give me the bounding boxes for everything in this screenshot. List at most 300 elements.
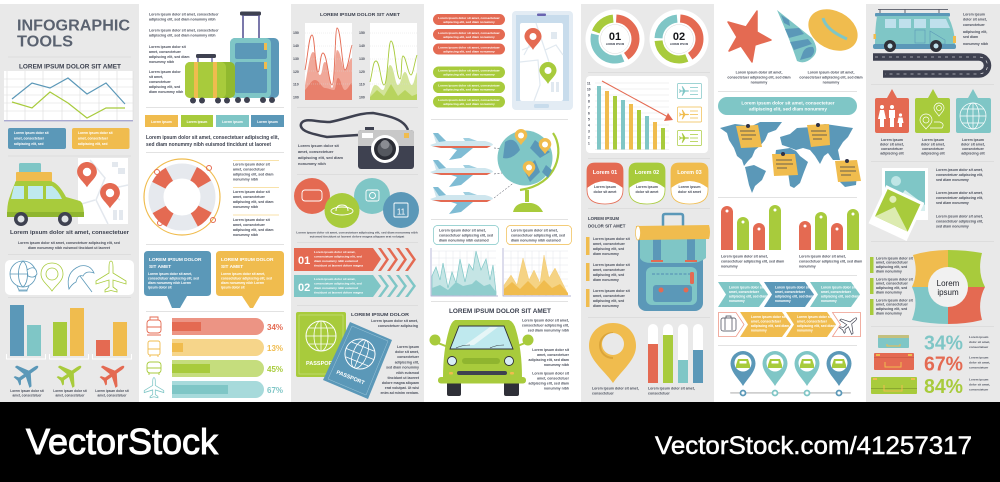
- callout: blue speech: Lorem ipsum dolor sit amet,: [148, 272, 192, 276]
- icon: train: [147, 317, 161, 335]
- banner: adipiscing elit, sed diam nonummy: [749, 107, 827, 112]
- text: intro: Lorem ipsum dolor sit amet, consectetuer adipiscing elit,: [146, 135, 280, 141]
- icon: road: [873, 57, 987, 74]
- list: backpack: Lorem ipsum dolor sit: [593, 263, 631, 267]
- list: backpack: adipiscing elit, sed: [593, 247, 624, 251]
- heading: backpack: LOREM IPSUM: [588, 216, 619, 221]
- heading: lorem ipsum: Lorem ipsum dolor sit amet, consectetuer: [10, 230, 130, 236]
- captions: adipiscing elit: [880, 152, 905, 156]
- callout: yellow speech: [216, 251, 284, 308]
- text: passport: nibh euismod: [396, 371, 419, 375]
- list: flower: Lorem ipsum dolor sit: [876, 278, 914, 282]
- map pins timeline: [730, 351, 852, 396]
- title: TOOLS: [17, 34, 73, 50]
- list: flower: amet, consectetuer: [876, 261, 909, 265]
- bar chart: [6, 305, 132, 359]
- tags: Lorem ipsum: [636, 185, 658, 189]
- text: photos: sed diam nonummy: [936, 224, 970, 228]
- callout: teal outline: Lorem ipsum dolor sit amet,: [439, 228, 486, 232]
- callout: blue: Lorem ipsum dolor sit: [14, 131, 50, 135]
- red pills: adipiscing elit, sed diam nonummy: [443, 49, 495, 53]
- text block: nonummy nibh: [149, 60, 174, 64]
- captions: adipiscing elit: [961, 152, 986, 156]
- text: camera: amet, consectetuer: [298, 149, 334, 154]
- text list: [233, 160, 279, 237]
- list: backpack: amet, consectetuer: [593, 242, 626, 246]
- callout: blue speech: SIT AMET: [149, 264, 171, 270]
- text: car: consectetuer adipiscing elit,: [522, 324, 569, 328]
- arrow 01: 01: [298, 255, 310, 267]
- percentages: 34%: [924, 332, 963, 354]
- text: photos: sed diam nonummy: [936, 178, 970, 182]
- label row: Lorem ipsum: [257, 120, 278, 124]
- red pills: Lorem ipsum dolor sit amet, consectetuer: [438, 45, 501, 49]
- text: camera: adipiscing elit, sed diam: [298, 155, 344, 160]
- captions: Lorem ipsum dolor sit amet,: [799, 254, 846, 258]
- list: backpack: diam nonummy: [593, 304, 619, 308]
- donut 01: [586, 10, 644, 68]
- list: backpack: Lorem ipsum dolor sit: [593, 237, 631, 241]
- text: percentages: dolor sit amet,: [969, 340, 990, 344]
- axis labels: red: 120: [293, 70, 299, 74]
- red pills: [433, 14, 505, 54]
- arrow 02: diam nonummy nibh euismod: [314, 286, 358, 290]
- text: bus: dolor sit amet,: [963, 18, 987, 22]
- list: flower: adipiscing elit, sed: [876, 265, 907, 269]
- icon: plane outline: [144, 378, 164, 398]
- declining bar chart: 5: [588, 118, 590, 122]
- text list: Lorem ipsum dolor sit: [233, 218, 271, 222]
- icon: planes: [430, 133, 525, 214]
- list: backpack: diam nonummy: [593, 252, 619, 256]
- green pills: Lorem ipsum dolor sit amet, consectetuer: [438, 68, 501, 72]
- text: car: Lorem ipsum dolor sit: [532, 372, 570, 376]
- body text: diam nonummy nibh euismod tincidunt ut laoreet: [28, 246, 111, 250]
- text block: adipiscing elit, sed: [149, 85, 180, 89]
- text block: sit amet,: [149, 75, 163, 79]
- captions: nonummy: [721, 264, 738, 268]
- red pills: Lorem ipsum dolor sit amet, consectetuer: [438, 16, 501, 20]
- label row: [145, 115, 284, 127]
- icon: green passport: PASSPORT: [306, 361, 336, 367]
- text list: nonummy nibh: [233, 233, 258, 237]
- axis labels: green: 110: [359, 82, 365, 86]
- list: flower: amet, consectetuer: [876, 303, 909, 307]
- captions: amet, consectetuer: [12, 394, 42, 398]
- icon: red plane: [95, 356, 131, 392]
- text: photos: Lorem ipsum dolor sit amet,: [936, 214, 983, 218]
- area chart: green: [370, 23, 417, 100]
- red pills: adipiscing elit, sed diam nonummy: [443, 20, 495, 24]
- icon: green suitcase: [871, 377, 917, 394]
- declining bar chart: 9: [588, 94, 590, 98]
- text: car: Lorem ipsum dolor sit amet,: [522, 318, 569, 322]
- title: INFOGRAPHIC: [17, 18, 130, 34]
- text: passport: dolor sit amet,: [395, 350, 419, 354]
- icon: plane: [96, 261, 126, 292]
- arrow row 2: amet, consectetuer: [797, 320, 828, 324]
- text: percentages: consectetuer: [969, 388, 989, 392]
- arrow 01: consectetuer adipiscing elit, sed: [314, 254, 362, 258]
- captions: consectetuer: [922, 147, 945, 151]
- axis labels: green: 140: [359, 44, 365, 48]
- arrow row 1: adipiscing elit, sed diam: [821, 294, 859, 298]
- arrow row 2: nonummy: [797, 328, 813, 332]
- arrow 01: Lorem ipsum dolor sit amet,: [314, 250, 356, 254]
- text block: adipiscing elit, sed diam nonummy nibh: [149, 34, 216, 38]
- callout: yellow: [72, 128, 130, 149]
- donut 01: LOREM IPSUM: [606, 42, 624, 46]
- icon: pin: [41, 263, 63, 291]
- callout: yellow speech: diam nonummy nibh Lorem: [221, 281, 264, 285]
- chart: teal area: [431, 248, 498, 296]
- tags: Lorem ipsum: [594, 185, 616, 189]
- car with luggage: [7, 163, 84, 226]
- body text: Lorem ipsum dolor sit amet, consectetuer adipiscing elit, sed: [18, 241, 120, 245]
- list: backpack: adipiscing elit, sed: [593, 273, 624, 277]
- captions: dolor sit amet,: [880, 142, 904, 146]
- donut 01: 01: [609, 31, 621, 43]
- progress bars: 45%: [267, 365, 283, 374]
- heading: LOREM IPSUM DOLOR SIT AMET: [19, 64, 121, 70]
- text: circles caption: [296, 230, 418, 238]
- arrow row 1: nonummy: [821, 299, 837, 303]
- declining bar chart: 10: [587, 88, 591, 92]
- text: car: [522, 318, 570, 390]
- captions: nonummy: [799, 264, 816, 268]
- text: intro: sed diam nonummy nibh euismod tincidunt ut laoreet: [146, 142, 271, 148]
- icon: blue passport: PASSPORT: [335, 370, 366, 387]
- axis labels: red: 100: [293, 96, 299, 100]
- callout: yellow: adipiscing elit, sed: [78, 142, 108, 146]
- captions: Lorem ipsum dolor sit amet,: [736, 70, 782, 74]
- callout: blue: amet, consectetuer: [14, 136, 45, 140]
- banner: Lorem ipsum dolor sit amet, consectetuer: [741, 101, 835, 106]
- list: backpack: diam nonummy: [593, 278, 619, 282]
- progress bars: 67%: [267, 386, 283, 395]
- text block: [149, 12, 219, 94]
- text: percentages: consectetuer: [969, 345, 989, 349]
- text: percentages: Lorem ipsum: [969, 378, 989, 382]
- callout: blue speech: diam nonummy nibh Lorem: [148, 281, 191, 285]
- text: passport: sed diam nonummy: [386, 366, 419, 370]
- arrow row 2: Lorem ipsum dolor sit: [797, 315, 833, 319]
- text: percentages: [969, 335, 990, 392]
- icon: starfish: [728, 11, 771, 62]
- arrow 01: tincidunt ut laoreet dolore magna: [314, 264, 363, 268]
- captions: consectetuer adipiscing elit, sed diam: [799, 76, 863, 80]
- panel: phone and globe: [430, 11, 573, 396]
- world map with notes: [720, 122, 861, 193]
- list: flower: diam nonummy: [876, 311, 902, 315]
- text: car: nonummy nibh: [544, 386, 569, 390]
- progress bars: 13%: [267, 344, 283, 353]
- text block: adipiscing elit, sed diam nonummy nibh: [149, 18, 216, 22]
- list: backpack: amet, consectetuer: [593, 294, 626, 298]
- text block: adipiscing elit, sed diam: [149, 55, 189, 59]
- text list: amet, consectetuer: [233, 223, 266, 227]
- callout: yellow speech: LOREM IPSUM DOLOR: [221, 257, 274, 263]
- tile: globe: [956, 89, 991, 133]
- heading: car: LOREM IPSUM DOLOR SIT AMET: [449, 308, 551, 315]
- chart: yellow area: [503, 248, 571, 296]
- captions: Lorem ipsum dolor sit amet,: [721, 254, 768, 258]
- text: photos: consectetuer adipiscing elit,: [936, 220, 983, 224]
- callout: teal outline: consectetuer adipiscing elit, sed: [439, 234, 493, 238]
- icon: car: [147, 362, 161, 375]
- panel: infographic tools: [4, 18, 134, 398]
- declining bar chart: 8: [588, 100, 590, 104]
- axis labels: green: 120: [359, 70, 365, 74]
- tags: dolor sit amet: [594, 190, 617, 194]
- arrow 01: [294, 248, 416, 271]
- list: flower: diam nonummy: [876, 269, 902, 273]
- text: bus: adipiscing elit,: [963, 30, 987, 34]
- icon: plane outline: [836, 311, 863, 338]
- icon: blue plane: [9, 356, 45, 392]
- banner: [718, 97, 857, 115]
- captions: Lorem ipsum dolor sit: [53, 389, 88, 393]
- callout: blue: [8, 128, 66, 149]
- captions: [592, 386, 695, 396]
- text list: Lorem ipsum dolor sit: [233, 190, 271, 194]
- callout: yellow speech: consectetuer adipiscing elit, sed: [221, 276, 272, 280]
- icon box: [5, 260, 134, 295]
- axis labels: green: 100: [359, 96, 365, 100]
- captions: consectetuer: [648, 392, 670, 396]
- declining bar chart: 4: [588, 124, 590, 128]
- axis labels: green: 150: [359, 31, 365, 35]
- text list: amet, consectetuer: [233, 195, 266, 199]
- diagram: flower: [912, 250, 985, 324]
- title: [17, 18, 130, 50]
- declining bar chart: 3: [588, 130, 590, 134]
- axis labels: red: [293, 31, 299, 100]
- icon: red suitcase: [874, 353, 914, 370]
- list: backpack: [586, 237, 631, 308]
- text list: Lorem ipsum dolor sit: [233, 162, 271, 166]
- captions: consectetuer adipiscing elit, sed diam: [799, 260, 862, 264]
- icon: balloon: [10, 261, 37, 291]
- diagram: flower: ipsum: [937, 288, 959, 297]
- arrow row 2: [718, 311, 863, 338]
- note 2: [807, 123, 830, 147]
- label row: Lorem ipsum: [222, 120, 243, 124]
- percentages: [924, 332, 963, 398]
- callout: blue speech: [144, 251, 211, 308]
- list: backpack: Lorem ipsum dolor sit: [593, 289, 631, 293]
- arrow row 1: [718, 282, 860, 307]
- panel: travel and world map: [718, 1, 865, 396]
- text: car: Lorem ipsum dolor sit: [532, 348, 570, 352]
- panel: charts and camera: [293, 12, 420, 399]
- arrow row 1: nonummy: [729, 299, 745, 303]
- declining bar chart: 7: [588, 106, 590, 110]
- tags: [587, 163, 708, 204]
- red pills: adipiscing elit, sed diam nonummy: [443, 35, 495, 39]
- icon circles: [294, 178, 419, 228]
- icon: green car front: [430, 320, 534, 396]
- label row: Lorem ipsum: [151, 120, 172, 124]
- text: percentages: Lorem ipsum: [969, 335, 989, 339]
- icon: hat: [801, 1, 865, 59]
- tags: Lorem 01: [593, 170, 617, 176]
- text: passport: consectetuer adipiscing: [378, 324, 418, 328]
- captions: amet, consectetuer: [97, 394, 127, 398]
- icon: bus: [148, 341, 160, 357]
- tags: Lorem 02: [635, 170, 659, 176]
- icon: big pin: [589, 323, 636, 383]
- text: car: nonummy nibh: [544, 363, 569, 367]
- arrow 02: Lorem ipsum dolor sit amet,: [314, 277, 356, 281]
- arrow row 2: nonummy: [751, 328, 767, 332]
- captions: adipiscing elit: [921, 152, 946, 156]
- green pills: [433, 66, 505, 108]
- arrow 02: [294, 275, 416, 297]
- axis labels: red: 130: [293, 57, 299, 61]
- text: intro: [146, 135, 280, 148]
- text list: amet, consectetuer: [233, 168, 266, 172]
- donut 02: LOREM IPSUM: [670, 42, 688, 46]
- text list: adipiscing elit, sed diam: [233, 172, 273, 176]
- text: photos: consectetuer adipiscing elit,: [936, 173, 983, 177]
- captions: dolor sit amet,: [921, 142, 945, 146]
- captions: [880, 138, 986, 156]
- list: backpack: amet, consectetuer: [593, 268, 626, 272]
- axis labels: green: [359, 31, 365, 100]
- list: flower: diam nonummy: [876, 290, 902, 294]
- callout: blue speech: ipsum dolor sit: [148, 286, 173, 290]
- icon: shell: [777, 10, 816, 62]
- green pills: adipiscing elit, sed diam nonummy: [443, 102, 495, 106]
- note 1: [736, 124, 762, 148]
- text block: consectetuer: [149, 80, 171, 84]
- arrow row 2: adipiscing elit, sed diam: [751, 324, 789, 328]
- text: photos: Lorem ipsum dolor sit amet,: [936, 168, 983, 172]
- icon: suitcase outline: [721, 316, 736, 331]
- note 4: [835, 159, 861, 182]
- percentages: 84%: [924, 376, 963, 398]
- rounded bars: [721, 205, 859, 250]
- declining bar chart: 11: [587, 82, 591, 86]
- heading: backpack: DOLOR SIT AMET: [588, 224, 626, 228]
- captions: [721, 254, 862, 268]
- text: passport: tincidunt ut laoreet: [388, 376, 420, 380]
- vertical bars: [648, 324, 703, 383]
- label row: Lorem ipsum: [187, 120, 207, 124]
- arrow row 1: Lorem ipsum dolor sit: [775, 286, 811, 290]
- callout: yellow speech: ipsum dolor sit: [221, 286, 246, 290]
- text: passport: Lorem ipsum dolor sit amet,: [371, 319, 418, 323]
- text: car: amet, consectetuer: [537, 376, 570, 380]
- brand: VectorStock: [26, 421, 219, 462]
- captions: Lorem ipsum: [881, 138, 903, 142]
- icon: teal suitcase: [878, 335, 909, 348]
- captions: [10, 389, 130, 398]
- captions: Lorem ipsum: [922, 138, 944, 142]
- tags: Lorem 03: [677, 170, 702, 176]
- icon: blue passport: [323, 322, 392, 399]
- captions: dolor sit amet,: [961, 142, 985, 146]
- captions: Lorem ipsum: [962, 138, 984, 142]
- callout: teal outline: [434, 226, 498, 244]
- diagram: flower: Lorem: [937, 279, 960, 288]
- text list: nonummy nibh: [233, 178, 258, 182]
- text list: adipiscing elit, sed diam: [233, 228, 273, 232]
- text: percentages: Lorem ipsum: [969, 356, 989, 360]
- arrow row 2: amet, consectetuer: [751, 320, 782, 324]
- progress bars: 34%: [267, 323, 283, 332]
- list: flower: amet, consectetuer: [876, 282, 909, 286]
- callout: yellow outline: Lorem ipsum dolor sit amet,: [511, 228, 558, 232]
- callout: teal outline: diam nonummy nibh euismod: [439, 238, 489, 242]
- panel: luggage: [144, 12, 284, 398]
- text: photos: sed diam nonummy: [936, 201, 970, 205]
- list: flower: Lorem ipsum dolor sit: [876, 298, 914, 302]
- text: camera: Lorem ipsum dolor sit: [298, 143, 340, 148]
- captions: consectetuer: [592, 392, 614, 396]
- text: photos: [936, 168, 983, 228]
- arrow row 1: amet, consectetuer: [729, 290, 760, 294]
- green pills: adipiscing elit, sed diam nonummy: [443, 88, 495, 92]
- callout: yellow outline: consectetuer adipiscing elit, sed: [511, 234, 565, 238]
- icon: phone with map: [512, 11, 573, 110]
- icon: big suitcase: [230, 12, 279, 103]
- icon: photos: [869, 168, 928, 241]
- text: passport: enim ad minim veniam.: [380, 391, 419, 395]
- captions: consectetuer adipiscing elit, sed diam: [727, 76, 791, 80]
- arrow row 1: Lorem ipsum dolor sit: [821, 286, 857, 290]
- text block: Lorem ipsum dolor sit: [149, 45, 187, 49]
- captions: Lorem ipsum dolor sit amet,: [648, 386, 695, 390]
- captions: amet, consectetuer: [55, 394, 85, 398]
- list: flower: [870, 256, 914, 315]
- text block: diam nonummy nibh: [149, 90, 183, 94]
- tags: dolor sit amet: [678, 190, 702, 194]
- callout: yellow speech: SIT AMET: [221, 264, 243, 270]
- tickets: [678, 84, 702, 146]
- footer band: [0, 402, 1000, 482]
- text list: adipiscing elit, sed diam: [233, 200, 273, 204]
- donut 02: 02: [673, 31, 685, 43]
- callout: yellow speech: Lorem ipsum dolor sit amet,: [221, 272, 265, 276]
- text: bus: Lorem ipsum: [963, 12, 985, 16]
- declining bar chart: [586, 76, 708, 153]
- text: percentages: consectetuer: [969, 366, 989, 370]
- text: percentages: dolor sit amet,: [969, 382, 990, 386]
- tags: dolor sit amet: [636, 190, 659, 194]
- text: bus: consectetuer: [963, 23, 985, 27]
- text: percentages: dolor sit amet,: [969, 360, 990, 364]
- tile: family: [875, 89, 909, 133]
- list: flower: adipiscing elit, sed: [876, 307, 907, 311]
- list: flower: adipiscing elit, sed: [876, 286, 907, 290]
- text: passport: Lorem ipsum: [397, 345, 419, 349]
- arrow row 1: Lorem ipsum dolor sit: [729, 286, 765, 290]
- text: car: adipiscing elit, sed diam: [529, 382, 569, 386]
- captions: consectetuer: [962, 147, 985, 151]
- arrow row 2: Lorem ipsum dolor sit: [751, 315, 787, 319]
- captions: Lorem ipsum dolor sit amet,: [592, 386, 639, 390]
- callout: blue speech: consectetuer adipiscing elit, sed: [148, 276, 199, 280]
- green pills: Lorem ipsum dolor sit amet, consectetuer: [438, 84, 501, 88]
- text: car: adipiscing elit, sed diam: [529, 358, 569, 362]
- icon: globe: [498, 129, 558, 212]
- axis labels: green: 130: [359, 57, 365, 61]
- declining bar chart: 2: [588, 136, 590, 140]
- callout: blue speech: LOREM IPSUM DOLOR: [149, 257, 202, 263]
- area chart: red: [305, 23, 352, 100]
